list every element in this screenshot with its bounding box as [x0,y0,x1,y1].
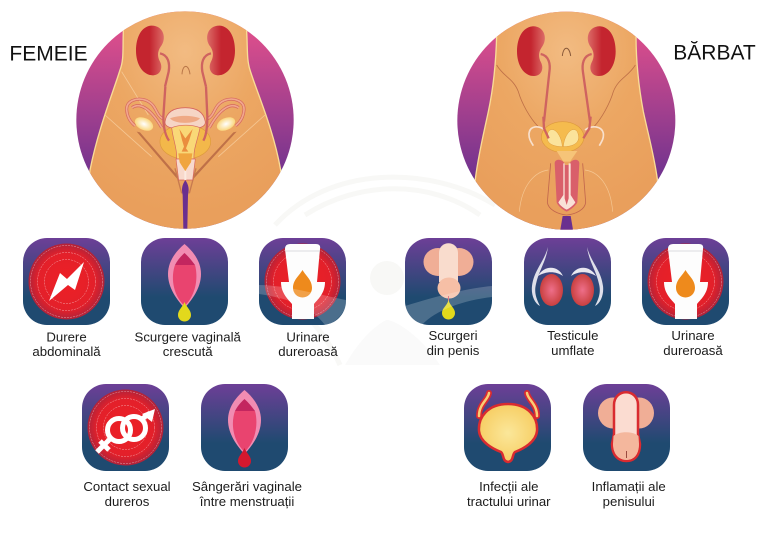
label: Sângerări vaginale [192,479,302,494]
icon: toilet [281,244,325,319]
navel [182,66,190,74]
icon tile: Infecții ale tractului urinar [464,384,551,471]
icon: drop [178,302,191,322]
bladder [541,122,584,152]
label: Scurgeri [428,328,478,343]
icon: drop [293,270,312,298]
ureters lower [163,87,207,141]
icon: lightning [49,262,84,301]
label: dureroasă [278,344,338,359]
label: penisului [603,494,655,509]
icon: blood drop [238,448,251,468]
kidneys [517,26,545,76]
icon tile: Durere abdominală [23,238,110,325]
vulva [182,180,189,229]
reproductive organs detail [127,87,244,229]
icon tile: Sângerări vaginale [201,384,288,471]
icon tile: Scurgere vaginală [141,238,228,325]
upper ureters [160,53,211,87]
label: dureros [105,494,150,509]
title: FEMEIE: FEMEIE [9,42,88,66]
dome [165,108,205,129]
uterus [172,125,200,159]
icon: cords [532,247,603,306]
label: Urinare [286,330,330,344]
upper ureters [541,54,592,122]
thighs [519,170,613,212]
label: Urinare [671,328,715,343]
label: între menstruații [199,494,294,509]
icon tile: Urinare dureroasă [642,238,729,325]
label: crescută [163,344,213,359]
penis [555,160,579,212]
icon: drop [442,300,455,320]
icon tile: Testicule umflate [524,238,611,325]
icon: drop [676,270,695,298]
bladder [160,124,211,159]
icon: left testicle [540,274,563,306]
ovaries [134,117,154,131]
icon tile: Inflamații ale penisului [583,384,670,471]
icon: shaft [612,392,640,461]
vagina canal [176,159,195,180]
label: Durere [46,330,87,344]
label: Infecții ale [479,479,538,494]
white arcs [529,127,603,146]
icon: toilet [664,244,708,319]
background watermark [260,177,495,365]
watermark overlay [259,285,492,325]
kidneys [136,26,164,75]
illustration: male anatomy [457,12,676,230]
navel [562,48,571,56]
icon: right testicle [571,274,594,306]
icon tile: Scurgeri din penis [405,238,492,325]
label: Testicule [547,328,598,343]
groin lines [137,132,237,179]
label: Contact sexual [83,479,171,494]
prostate [557,151,577,162]
pelvic organs detail [519,117,613,232]
hip lines [497,65,635,127]
body [474,12,658,230]
label: Inflamații ale [592,479,666,494]
icon: gender symbols [97,413,150,452]
label: Scurgere vaginală [135,330,241,344]
icon tile: Urinare dureroasă [259,238,346,325]
label: tractului urinar [467,494,551,509]
icon: bladder [479,404,537,462]
scrotum [547,163,586,215]
base [560,216,573,230]
ureters lower [543,117,591,138]
label: umflate [551,343,594,358]
label: abdominală [32,344,101,359]
label: dureroasă [663,343,723,358]
illustration: female anatomy [76,11,294,229]
fallopian tubes [127,99,163,128]
icon tile: Contact sexual dureros [82,384,169,471]
title: BĂRBAT: BĂRBAT [673,42,756,64]
body [89,11,282,229]
label: din penis [427,343,480,358]
